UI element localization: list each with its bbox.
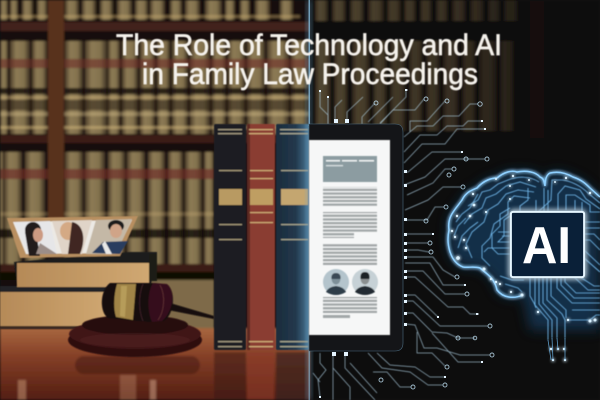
AI label: AI [522,217,571,275]
AI brain [448,171,600,361]
document page [309,140,390,335]
glowing divider line [306,0,312,400]
shelf 1 [0,22,310,31]
brain glow [448,171,600,330]
icon: family photo frame [7,216,138,258]
gavel head [102,283,173,322]
title: in Family Law Proceedings [142,58,478,91]
book row 1 [0,0,293,20]
upper book [14,252,157,287]
document text lines [323,187,377,318]
stacked law books with photo frame [0,216,157,329]
shelf 2 [0,135,310,143]
circuit nodes [374,97,494,389]
book: red [247,124,275,350]
right dark library background [310,0,600,400]
circuit traces around tablet [313,90,490,400]
brain glowing nodes [451,175,596,361]
brain outline [448,171,600,297]
title [116,29,502,91]
left library background [0,0,310,340]
tablet body [309,124,403,351]
brain internal traces [454,177,600,340]
tablet with legal document [309,124,403,351]
sound block [68,315,202,357]
book: dark blue [276,124,309,350]
AI chip box [511,212,584,277]
lower book [0,286,112,329]
post [48,0,64,232]
lower brain stem lines [548,338,565,360]
book row 3 [0,152,214,264]
portrait left [323,269,349,295]
book: dark navy [214,124,246,350]
document header block [323,156,377,182]
title: The Role of Technology and AI [116,29,502,62]
book row 4 [150,280,214,330]
handle [168,303,214,319]
gavel and sound block [68,283,214,357]
wooden desk [0,328,310,400]
traces below AI box [530,277,536,308]
book row 2 [0,41,308,134]
portrait right [352,269,378,295]
shelf 3 [0,264,214,272]
three hardback law books [214,124,309,350]
